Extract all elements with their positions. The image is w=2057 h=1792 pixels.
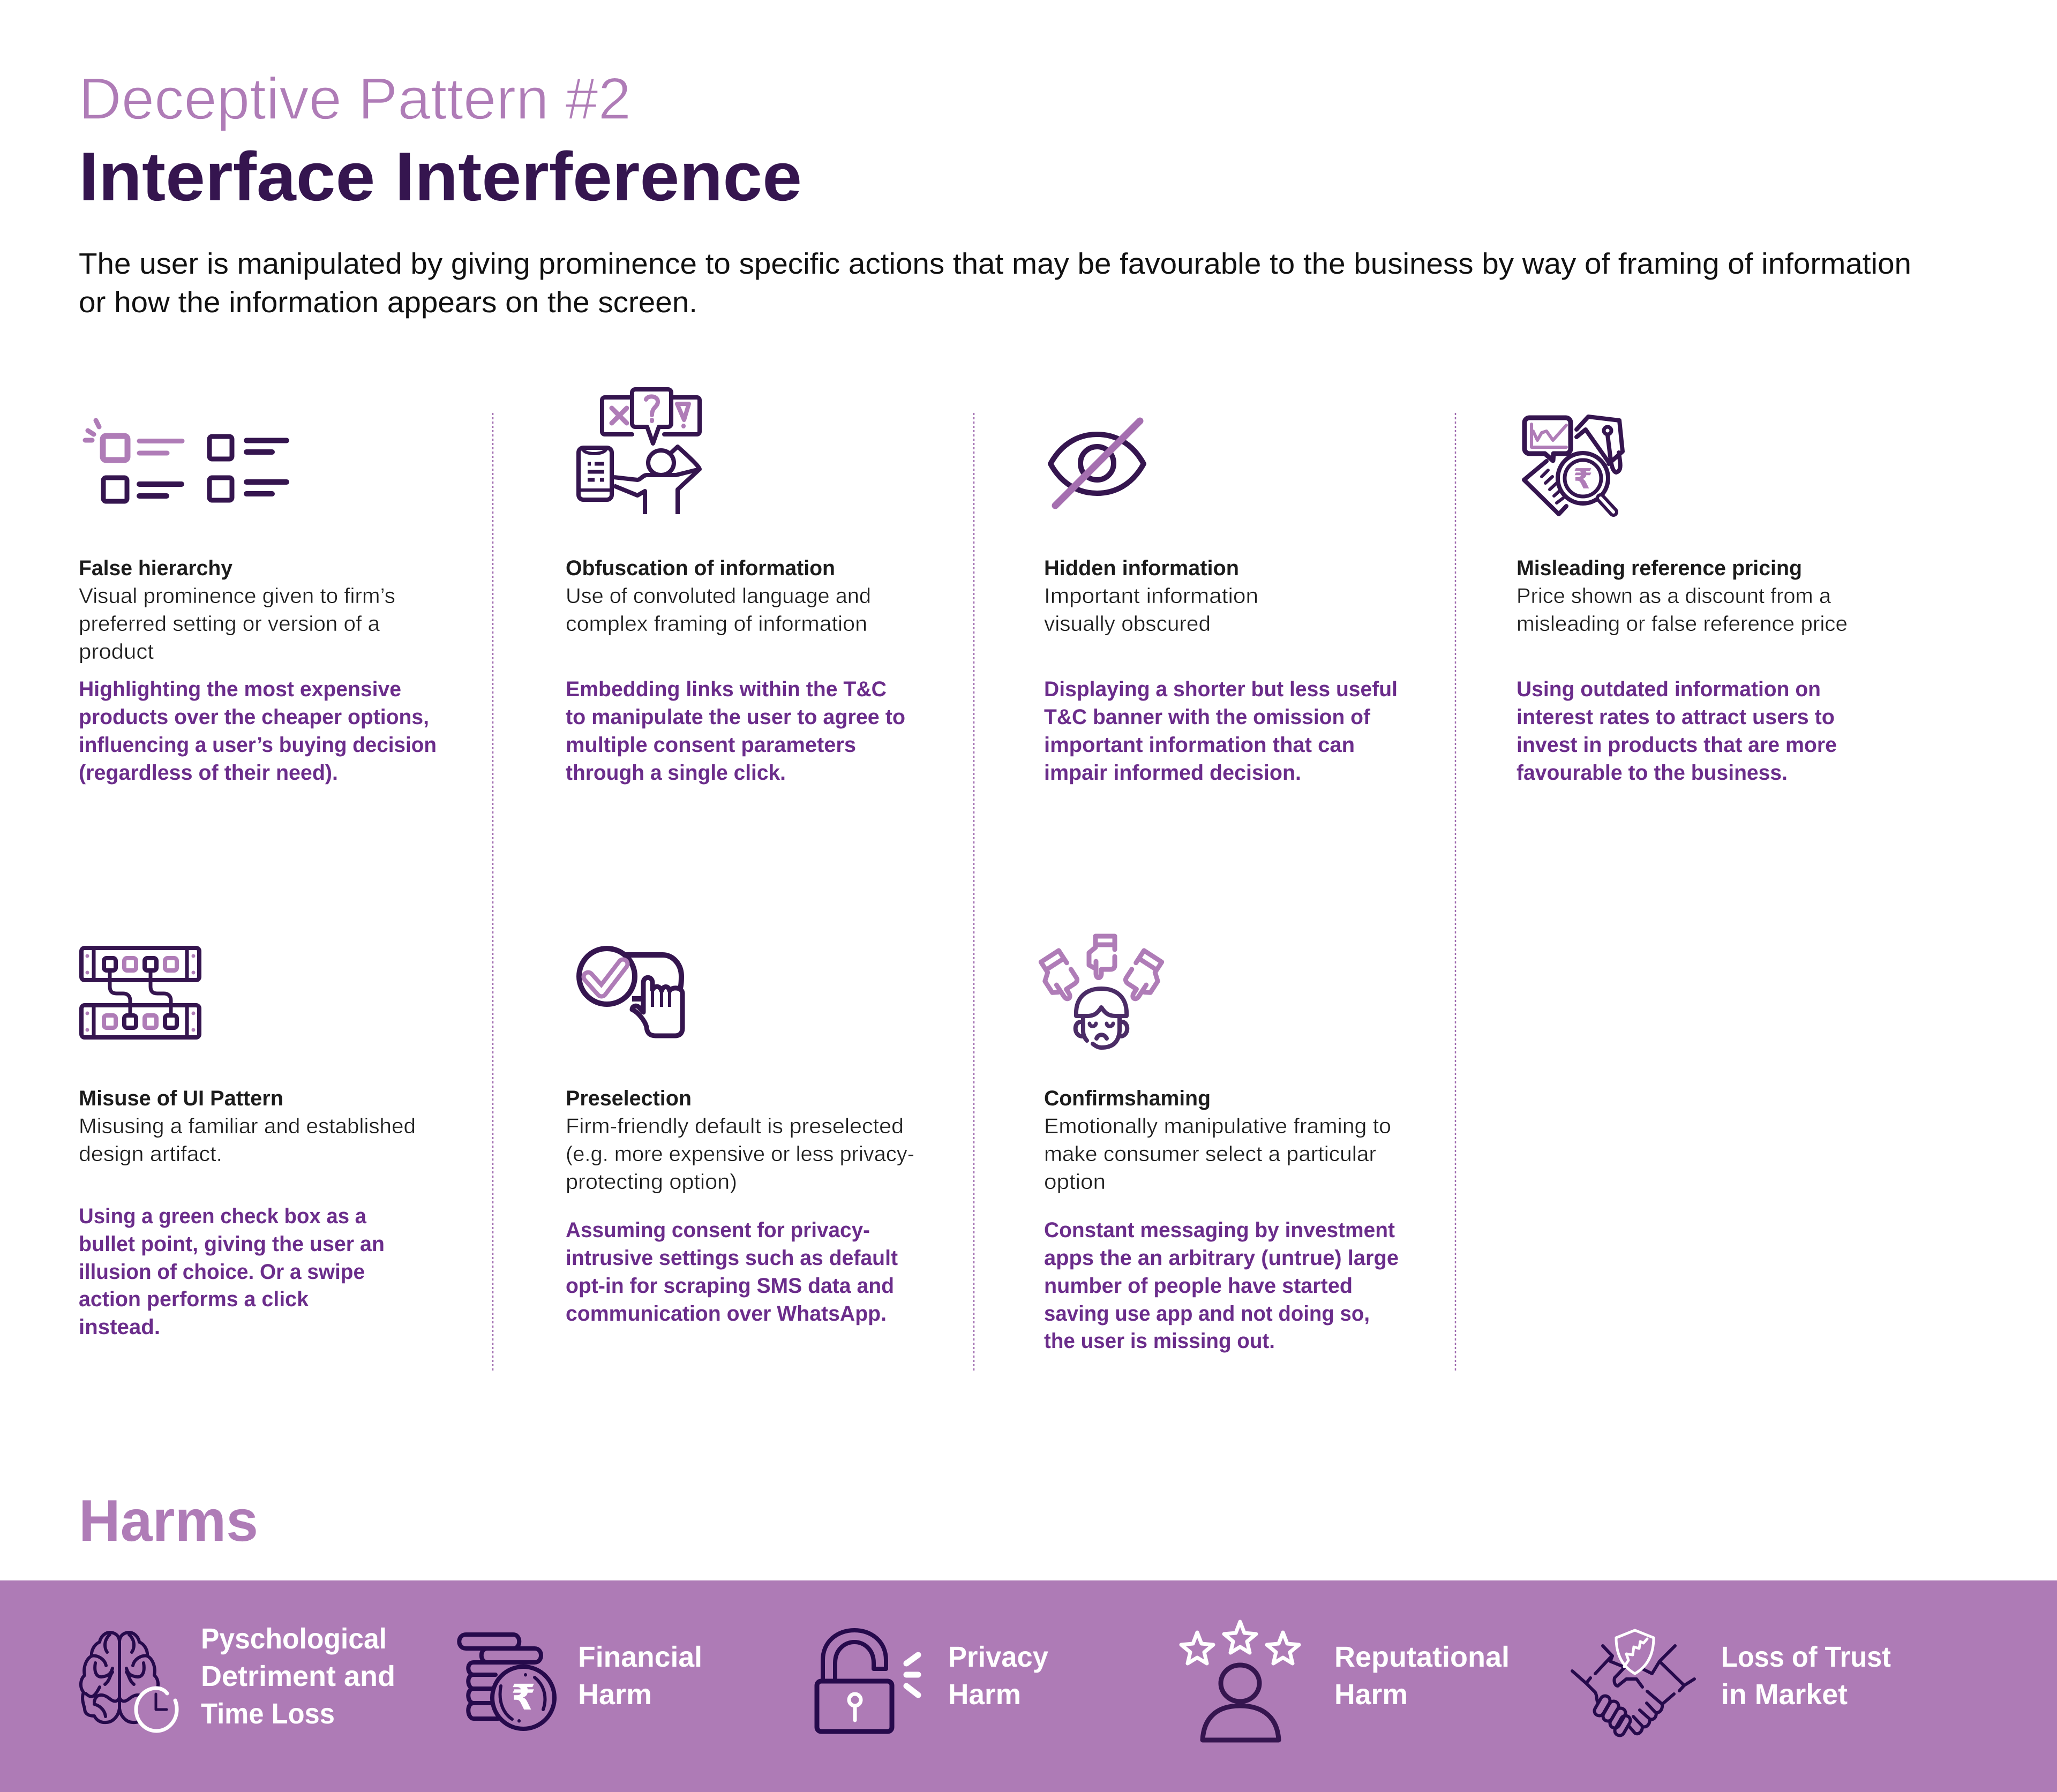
- label: Loss of Trust in Market: in Market: [1721, 1678, 1848, 1711]
- description: False hierarchy: preferred setting or version of a: [79, 612, 380, 636]
- panel: false hierarchy: [79, 420, 437, 785]
- icon: sad face with pointing hands: [1035, 936, 1168, 1048]
- description: Obfuscation: complex framing of information: [566, 612, 867, 636]
- example: Misuse of UI Pattern: Using a green check box as a: [79, 1204, 367, 1228]
- heading: Harms: Harms: [79, 1488, 258, 1554]
- label: Pyschological Detriment and Time Loss: Time Loss: [201, 1698, 335, 1730]
- example: False hierarchy: (regardless of their need).: [79, 761, 338, 785]
- example: Confirmshaming: [1044, 1218, 1399, 1353]
- example: Misleading reference pricing: favourable to the business.: [1517, 761, 1788, 785]
- example: Misuse of UI Pattern: illusion of choice. Or a swipe: [79, 1260, 365, 1284]
- description: Misuse of UI Pattern: design artifact.: [79, 1142, 222, 1166]
- description: Preselection: (e.g. more expensive or less privacy-: [566, 1142, 914, 1166]
- example: Confirmshaming: Constant messaging by investment: [1044, 1218, 1395, 1242]
- icon part: left pointing hand: [1035, 951, 1084, 1004]
- example: Misuse of UI Pattern: action performs a click: [79, 1287, 309, 1311]
- description: Misuse of UI Pattern: Misusing a familiar and established: [79, 1115, 416, 1138]
- heading: Hidden information: Hidden information: [1044, 556, 1239, 580]
- description: False hierarchy: product: [79, 640, 154, 664]
- icon: chart bubble, price tag, receipt and magnifier: [1524, 417, 1623, 514]
- heading: Misleading reference pricing: Misleading reference pricing: [1517, 556, 1802, 580]
- example: False hierarchy: Highlighting the most expensive: [79, 677, 401, 701]
- harm: loss of trust in market: [1572, 1630, 1891, 1737]
- icon part: sad face: [1076, 989, 1127, 1048]
- intro paragraph: or how the information appears on the screen.: [79, 285, 697, 319]
- heading: Confirmshaming: Confirmshaming: [1044, 1087, 1211, 1110]
- panel: preselection: [566, 948, 914, 1326]
- panel: hidden information: [1044, 421, 1398, 785]
- icon: two connected UI panels: [81, 948, 199, 1037]
- example: Hidden information: [1044, 677, 1398, 785]
- icon: coin stack with rupee coin: [459, 1635, 554, 1729]
- description: Misleading reference pricing: misleading or false reference price: [1517, 612, 1848, 636]
- icon: handshake with cracked shield: [1572, 1630, 1694, 1737]
- intro paragraph: The user is manipulated by giving prominence to specific actions that may be favourable to the business by way of framing of information: [79, 247, 1911, 280]
- label: Financial Harm: [578, 1641, 702, 1711]
- label: Financial Harm: Financial: [578, 1641, 702, 1673]
- icon part: centre pointing hand: [1089, 936, 1115, 978]
- example: Hidden information: T&C banner with the omission of: [1044, 705, 1371, 729]
- example: Misuse of UI Pattern: instead.: [79, 1315, 160, 1339]
- example: Preselection: communication over WhatsApp.: [566, 1302, 887, 1326]
- label: Reputational Harm: Harm: [1334, 1678, 1408, 1711]
- example: False hierarchy: products over the cheaper options,: [79, 705, 429, 729]
- description: Preselection: Firm-friendly default is preselected: [566, 1115, 904, 1138]
- example: Obfuscation: multiple consent parameters: [566, 733, 856, 757]
- description: Misleading reference pricing: Price shown as a discount from a: [1517, 584, 1831, 608]
- example: Hidden information: Displaying a shorter but less useful: [1044, 677, 1398, 701]
- label: Privacy Harm: Harm: [948, 1678, 1021, 1711]
- description: Obfuscation: [566, 584, 871, 636]
- heading: Preselection: Preselection: [566, 1087, 692, 1110]
- icon: brain with clock: [81, 1632, 177, 1731]
- example: Confirmshaming: number of people have started: [1044, 1274, 1353, 1298]
- title: Interface Interference: Interface Interference: [79, 138, 802, 215]
- panel: confirmshaming: [1035, 936, 1399, 1353]
- icon: crossed-out eye: [1050, 421, 1144, 506]
- icon: false hierarchy checklist: [85, 420, 287, 501]
- example: Misleading reference pricing: Using outdated information on: [1517, 677, 1821, 701]
- icon: coin stack with rupee coin: ₹: [511, 1677, 536, 1717]
- label: Pyschological Detriment and Time Loss: Detriment and: [201, 1660, 395, 1692]
- icon: person reading phone with question bubbles: [579, 389, 700, 514]
- harm: psychological detriment and time loss: [81, 1623, 395, 1731]
- example: Hidden information: impair informed decision.: [1044, 761, 1301, 785]
- heading: Obfuscation of information: Obfuscation of information: [566, 556, 835, 580]
- panel: harms band: [0, 1580, 2057, 1792]
- heading: False hierarchy: False hierarchy: [79, 556, 233, 580]
- harm: privacy harm: [817, 1630, 1048, 1731]
- example: Confirmshaming: the user is missing out.: [1044, 1329, 1275, 1353]
- example: Preselection: opt-in for scraping SMS data and: [566, 1274, 894, 1298]
- description: Confirmshaming: [1044, 1115, 1391, 1194]
- column dividers: [493, 413, 1455, 1371]
- description: Confirmshaming: make consumer select a particular: [1044, 1142, 1376, 1166]
- description: Hidden information: [1044, 584, 1258, 636]
- example: Misleading reference pricing: [1517, 677, 1837, 785]
- example: Confirmshaming: apps the an arbitrary (untrue) large: [1044, 1246, 1399, 1270]
- description: False hierarchy: [79, 584, 395, 664]
- label: Privacy Harm: [948, 1641, 1048, 1711]
- example: Hidden information: important information that can: [1044, 733, 1355, 757]
- panel: obfuscation of information: [566, 389, 905, 785]
- panel: misleading reference pricing: [1517, 417, 1848, 785]
- harm: reputational harm: [1181, 1622, 1510, 1740]
- label: Loss of Trust in Market: Loss of Trust: [1721, 1641, 1891, 1673]
- example: Preselection: intrusive settings such as default: [566, 1246, 898, 1270]
- harm: financial harm: [459, 1635, 702, 1729]
- panel: misuse of UI pattern: [79, 948, 416, 1339]
- example: Obfuscation: through a single click.: [566, 761, 786, 785]
- label: Reputational Harm: Reputational: [1334, 1641, 1510, 1673]
- label: Privacy Harm: Privacy: [948, 1641, 1048, 1673]
- example: Preselection: [566, 1218, 898, 1326]
- description: Confirmshaming: Emotionally manipulative framing to: [1044, 1115, 1391, 1138]
- label: Pyschological Detriment and Time Loss: Pyschological: [201, 1623, 387, 1655]
- icon part: right pointing hand: [1119, 951, 1168, 1004]
- example: Obfuscation: to manipulate the user to agree to: [566, 705, 905, 729]
- description: Preselection: protecting option): [566, 1170, 737, 1194]
- description: Hidden information: Important information: [1044, 584, 1258, 608]
- label: Reputational Harm: [1334, 1641, 1510, 1711]
- example: Confirmshaming: saving use app and not doing so,: [1044, 1302, 1370, 1326]
- eyebrow heading: Deceptive Pattern #2: Deceptive Pattern #2: [79, 66, 631, 132]
- label: Financial Harm: Harm: [578, 1678, 652, 1711]
- label: Pyschological Detriment and Time Loss: [201, 1623, 395, 1730]
- description: Misuse of UI Pattern: [79, 1115, 416, 1166]
- icon: open padlock: [817, 1630, 918, 1731]
- label: Loss of Trust in Market: [1721, 1641, 1891, 1711]
- description: Misleading reference pricing: [1517, 584, 1848, 636]
- example: Misleading reference pricing: invest in products that are more: [1517, 733, 1837, 757]
- example: Misleading reference pricing: interest rates to attract users to: [1517, 705, 1835, 729]
- intro paragraph: [79, 247, 1911, 319]
- description: Confirmshaming: option: [1044, 1170, 1106, 1194]
- example: False hierarchy: [79, 677, 437, 785]
- description: False hierarchy: Visual prominence given to firm’s: [79, 584, 395, 608]
- description: Hidden information: visually obscured: [1044, 612, 1211, 636]
- description: Obfuscation: Use of convoluted language and: [566, 584, 871, 608]
- example: Misuse of UI Pattern: [79, 1204, 385, 1339]
- example: False hierarchy: influencing a user’s buying decision: [79, 733, 437, 757]
- description: Preselection: [566, 1115, 914, 1194]
- icon: person with three stars: [1181, 1622, 1299, 1740]
- icon: chart bubble, price tag, receipt and magnifier: ₹: [1573, 464, 1593, 495]
- example: Obfuscation: [566, 677, 905, 785]
- heading: Misuse of UI Pattern: Misuse of UI Pattern: [79, 1087, 283, 1110]
- example: Obfuscation: Embedding links within the T&C: [566, 677, 887, 701]
- example: Misuse of UI Pattern: bullet point, giving the user an: [79, 1232, 385, 1256]
- icon: checked circle with pointing hand: [579, 948, 682, 1036]
- example: Preselection: Assuming consent for privacy-: [566, 1218, 870, 1242]
